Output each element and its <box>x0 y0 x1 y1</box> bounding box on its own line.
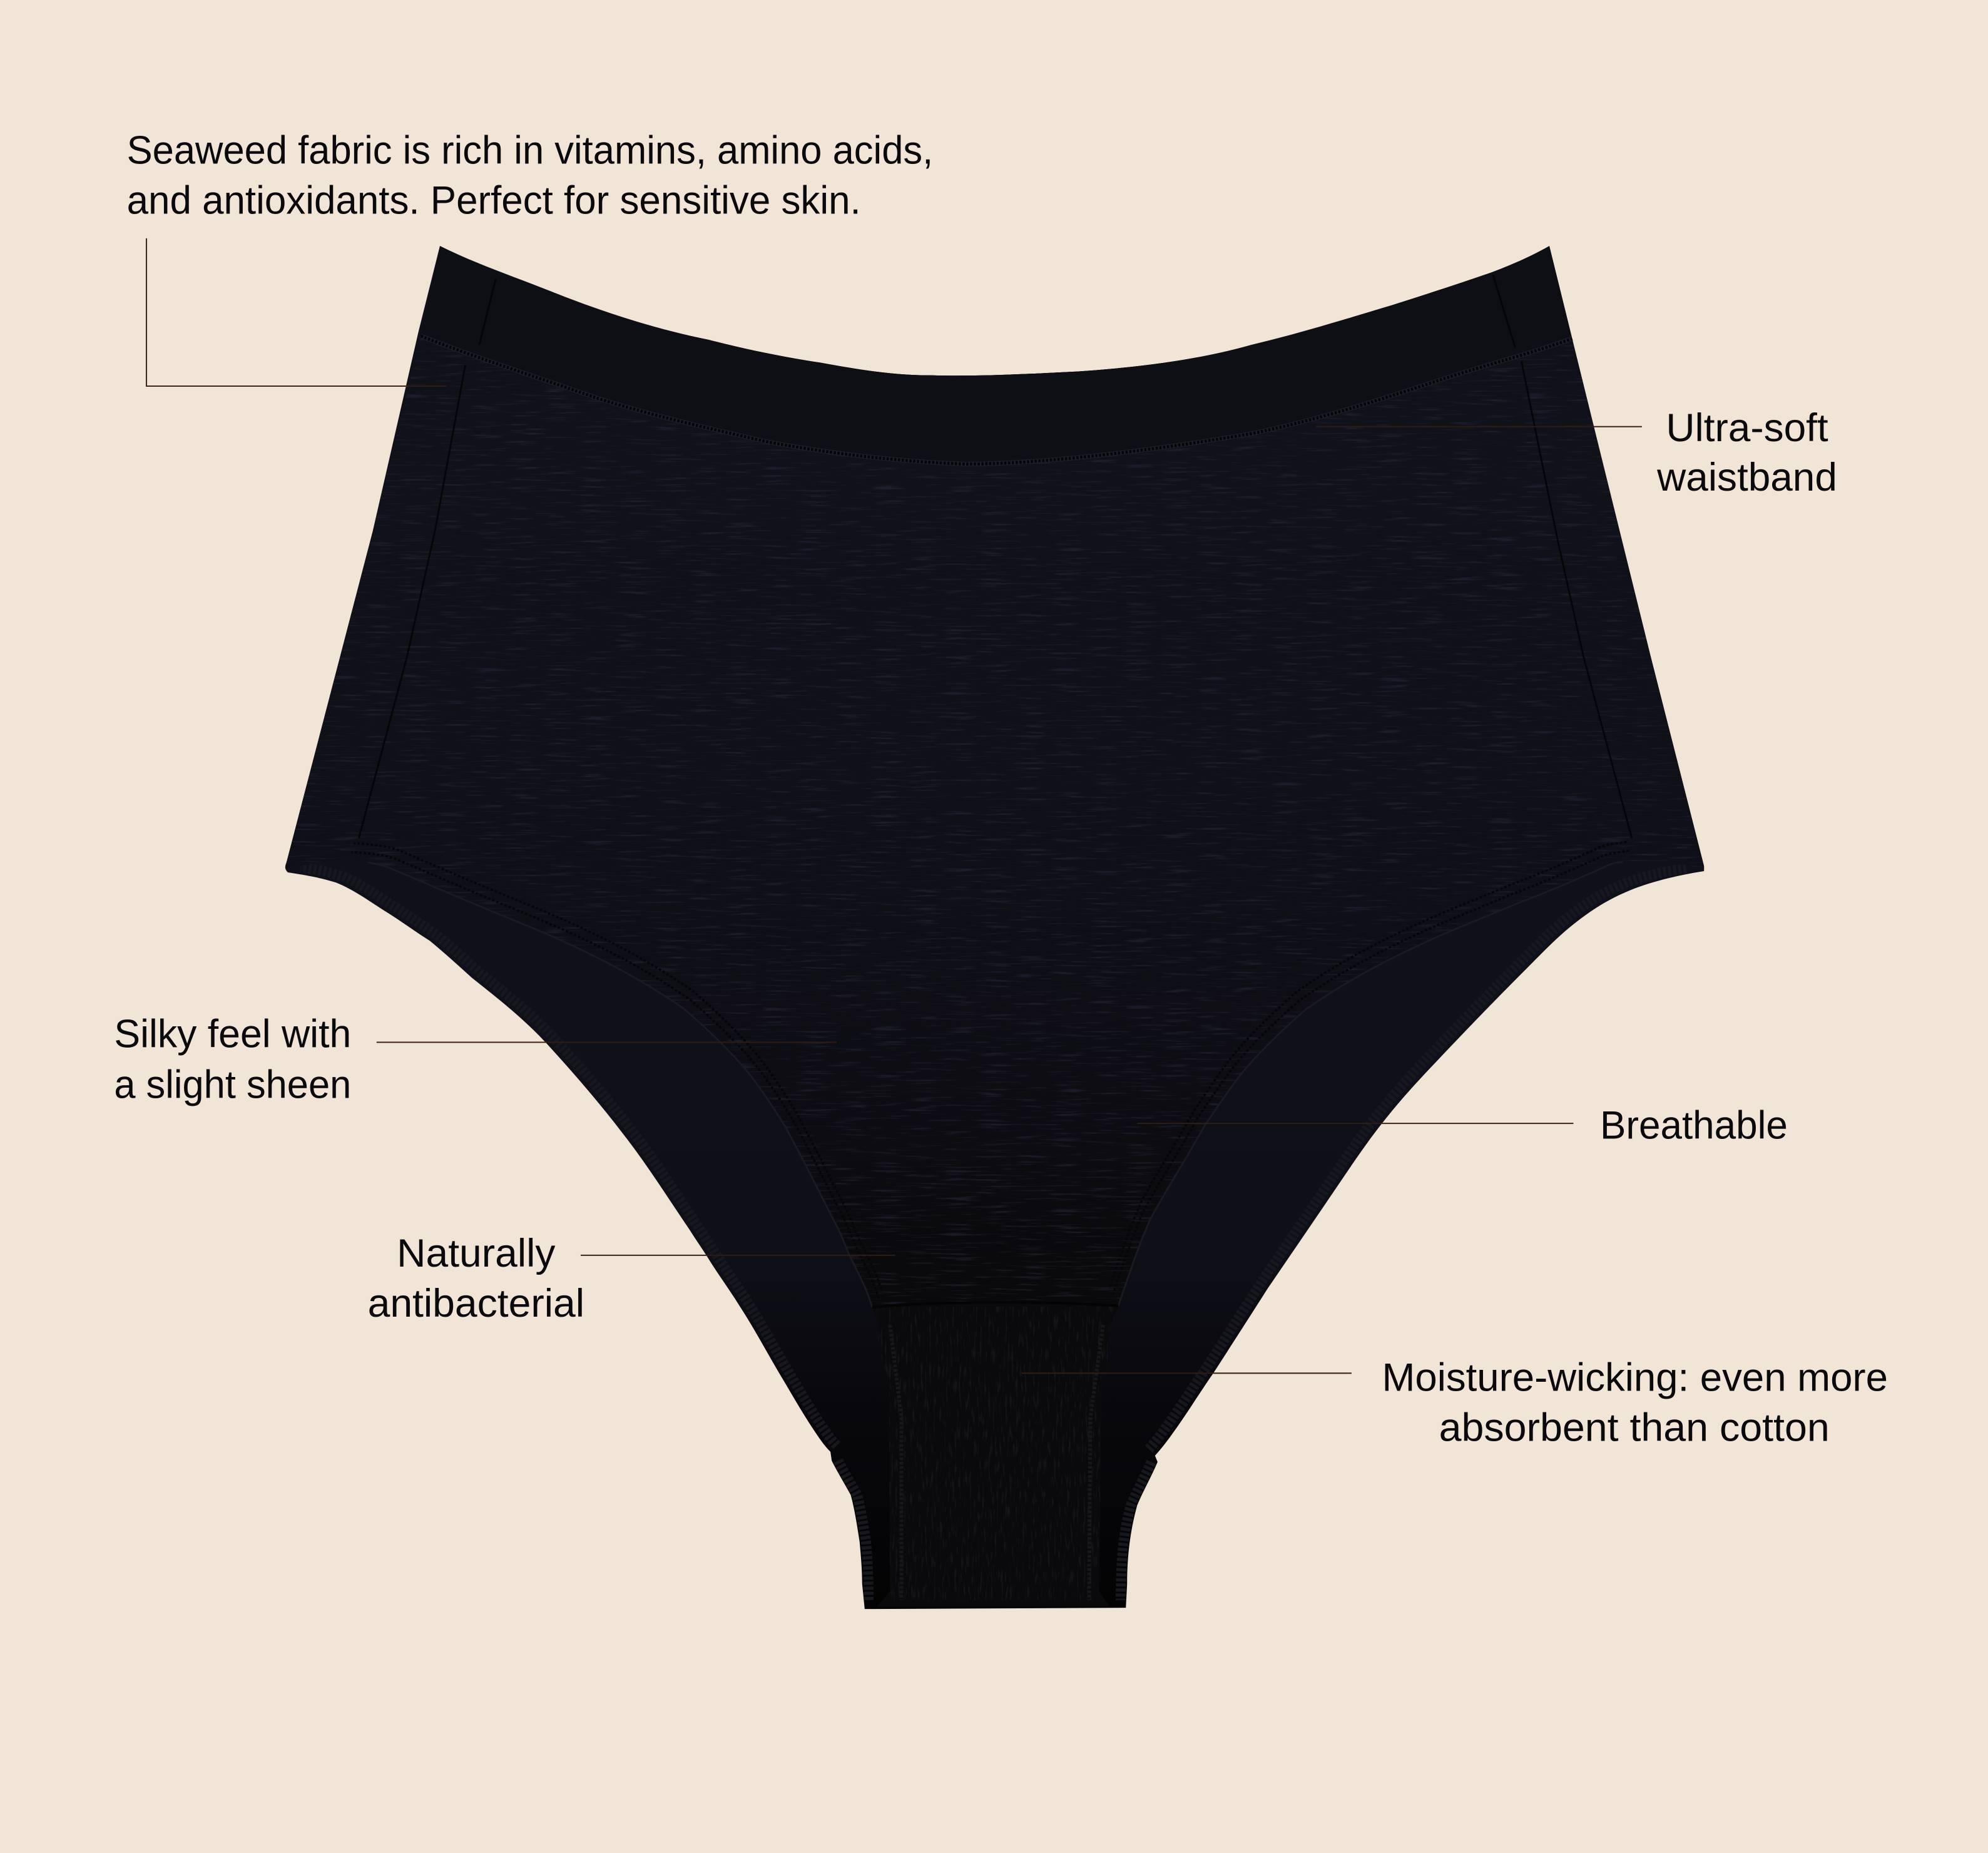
callout: seaweed fabric <box>127 128 933 386</box>
callout: moisture-wicking <box>1022 1356 1888 1450</box>
leader line <box>581 1255 895 1256</box>
gusset seams <box>890 1325 902 1600</box>
callout: naturally antibacterial <box>368 1232 895 1325</box>
fabric slub texture <box>287 332 1706 1315</box>
callout text: a slight sheen <box>114 1063 351 1107</box>
callout text: absorbent than cotton <box>1439 1406 1830 1450</box>
callout: ultra-soft waistband <box>1316 406 1837 499</box>
callout text <box>1656 406 1837 499</box>
waistband shading <box>421 246 1572 464</box>
callout text: and antioxidants. Perfect for sensitive skin. <box>127 178 861 222</box>
leg binding <box>300 867 1686 1600</box>
side seams and waistband verticals <box>359 275 1632 838</box>
leader line <box>146 238 446 386</box>
callout text: Naturally <box>397 1232 556 1275</box>
callout text: antibacterial <box>368 1282 584 1325</box>
leader line <box>1316 426 1642 427</box>
front panel seam stitching <box>351 842 1629 1307</box>
callout text: Ultra-soft <box>1666 406 1828 450</box>
waistband seam <box>421 336 1572 464</box>
callout text: Breathable <box>1600 1103 1788 1147</box>
gusset panel <box>872 1302 1122 1606</box>
leader line <box>1137 1123 1573 1124</box>
garment: black high-waist briefs <box>285 246 1706 1609</box>
leader line <box>377 1041 837 1043</box>
callout text: Seaweed fabric is rich in vitamins, amino acids, <box>127 128 933 172</box>
callout text <box>1382 1356 1888 1450</box>
leader line <box>1022 1372 1352 1374</box>
callout text <box>368 1232 584 1325</box>
gusset weave texture <box>875 1306 1122 1604</box>
callout text <box>114 1013 351 1107</box>
callout: silky feel <box>114 1013 837 1107</box>
garment silhouette <box>285 246 1704 1609</box>
callout text: Silky feel with <box>114 1013 351 1056</box>
front panel <box>285 246 1706 1315</box>
callout text <box>127 128 933 222</box>
callout text: Moisture-wicking: even more <box>1382 1356 1888 1400</box>
callout text: waistband <box>1656 456 1837 499</box>
